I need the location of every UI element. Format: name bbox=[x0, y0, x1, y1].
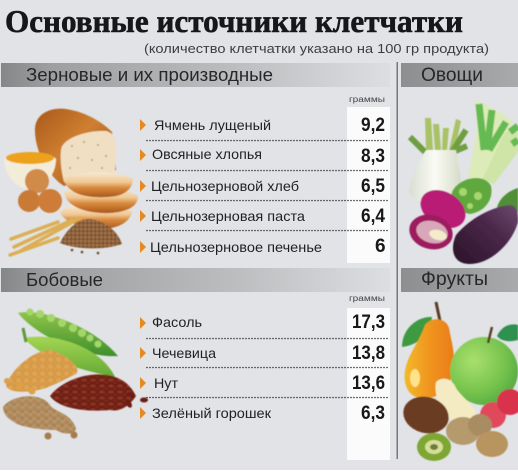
list: legumes: 6,3 bbox=[361, 403, 385, 424]
list: legumes: Зелёный горошек bbox=[152, 405, 272, 421]
list: legumes: 13,8 bbox=[352, 343, 385, 364]
panel: legumes heading bbox=[1, 268, 390, 292]
list: grains: Ячмень лущеный bbox=[154, 117, 271, 133]
list: legumes: 17,3 bbox=[352, 312, 385, 333]
title: Основные источники клетчатки bbox=[5, 3, 463, 39]
icon: fruits illustration bbox=[399, 302, 518, 461]
label: grams, grains: граммы bbox=[349, 95, 385, 104]
list: grains: Цельнозерновой хлеб bbox=[151, 178, 299, 194]
list: legumes: Нут bbox=[154, 375, 179, 391]
column divider bbox=[396, 62, 398, 459]
panel: legumes heading: Бобовые bbox=[26, 269, 103, 290]
panel: vegetables heading bbox=[401, 63, 518, 87]
list: grains: 8,3 bbox=[361, 146, 385, 167]
list: grains: 6,4 bbox=[361, 206, 385, 227]
panel: fruits heading: Фрукты bbox=[421, 269, 488, 290]
list: grains: 9,2 bbox=[361, 115, 385, 136]
label: grams, legumes: граммы bbox=[349, 294, 385, 303]
panel: vegetables heading: Овощи bbox=[421, 65, 483, 86]
list: legumes: Чечевица bbox=[152, 345, 216, 361]
list: legumes bbox=[140, 312, 388, 424]
list: legumes: 13,6 bbox=[352, 373, 385, 394]
list: grains: 6 bbox=[375, 236, 386, 257]
panel: grains heading: Зерновые и их производные bbox=[26, 64, 273, 85]
list: grains: Овсяные хлопья bbox=[152, 146, 262, 162]
icon: vegetables illustration bbox=[405, 100, 518, 264]
icon: bread and grains illustration bbox=[4, 109, 138, 255]
subtitle: (количество клетчатки указано на 100 гр продукта) bbox=[144, 41, 489, 56]
list: grains: Цельнозерновая паста bbox=[151, 208, 305, 224]
icon: pods and beans illustration bbox=[3, 308, 148, 440]
value column: legumes bbox=[347, 308, 390, 460]
list: grains: Цельнозерновое печенье bbox=[150, 239, 322, 255]
list: legumes: Фасоль bbox=[152, 314, 202, 330]
list: grains bbox=[140, 115, 388, 257]
value column: grains bbox=[347, 107, 390, 263]
panel: fruits heading bbox=[401, 268, 518, 292]
panel: grains heading bbox=[1, 63, 390, 87]
list: grains: 6,5 bbox=[361, 176, 385, 197]
